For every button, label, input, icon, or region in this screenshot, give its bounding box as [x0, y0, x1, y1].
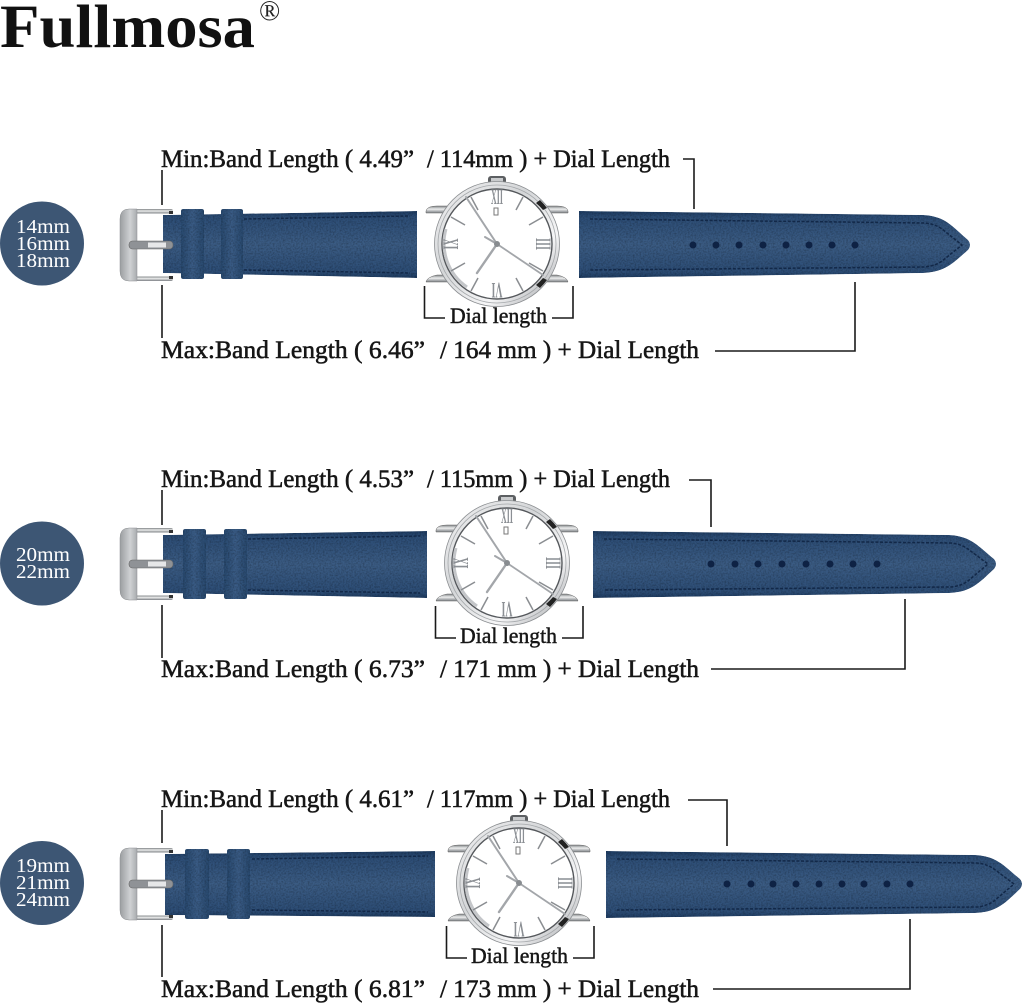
short strap with keepers [163, 209, 417, 279]
min length label [161, 146, 670, 173]
min length label: / 114mm ) + Dial Length [427, 146, 670, 173]
size badge 19mm 21mm 24mm: 19mm [16, 855, 70, 877]
size badge 20mm 22mm: 20mm [16, 544, 70, 566]
max length label: Max:Band Length ( 6.46” [161, 337, 425, 364]
size badge 19mm 21mm 24mm: 21mm [16, 872, 70, 894]
long strap with holes [579, 211, 970, 278]
min length label: Min:Band Length ( 4.53” [161, 466, 414, 493]
dial length bracket: Dial length [450, 303, 547, 328]
watch head [436, 495, 578, 626]
max length label: Max:Band Length ( 6.73” [161, 656, 425, 683]
min length label [161, 786, 670, 813]
dial length bracket [424, 286, 573, 328]
size badge 19mm 21mm 24mm [0, 841, 84, 925]
buckle [120, 528, 173, 600]
size badge 14mm 16mm 18mm: 14mm [16, 216, 70, 238]
short strap with keepers [165, 849, 435, 919]
max length label [161, 976, 699, 1003]
size badge 14mm 16mm 18mm [0, 202, 84, 286]
dial length bracket: Dial length [460, 623, 557, 648]
size badge 20mm 22mm: 22mm [16, 561, 70, 583]
row 2: 20/22mm band sizes [0, 466, 996, 683]
long strap with holes [606, 851, 1022, 918]
min and max leader lines [162, 159, 855, 351]
size badge 20mm 22mm [0, 522, 84, 606]
size badge 14mm 16mm 18mm: 16mm [16, 233, 70, 255]
min length label [161, 466, 670, 493]
max length label: / 173 mm ) + Dial Length [440, 976, 699, 1003]
max length label [161, 656, 699, 683]
dial length bracket: Dial length [471, 943, 568, 968]
short strap with keepers [163, 529, 427, 599]
dial length bracket [446, 926, 594, 968]
min and max leader lines [162, 480, 905, 669]
min length label: Min:Band Length ( 4.61” [161, 786, 414, 813]
long strap with holes [593, 531, 996, 598]
dial length bracket [436, 606, 583, 648]
size badge 19mm 21mm 24mm: 24mm [16, 889, 70, 911]
row 3: 19/21/24mm band sizes [0, 786, 1022, 1003]
max length label: / 171 mm ) + Dial Length [440, 656, 699, 683]
size badge 14mm 16mm 18mm: 18mm [16, 250, 70, 272]
min length label: / 117mm ) + Dial Length [427, 786, 670, 813]
min and max leader lines [162, 800, 910, 989]
watch head [426, 176, 568, 306]
watch head [448, 815, 590, 946]
min length label: / 115mm ) + Dial Length [427, 466, 670, 493]
buckle [120, 848, 173, 920]
min length label: Min:Band Length ( 4.49” [161, 146, 414, 173]
buckle [120, 209, 173, 281]
row 1: 14/16/18mm band sizes [0, 146, 970, 364]
max length label [161, 337, 699, 364]
max length label: / 164 mm ) + Dial Length [440, 337, 699, 364]
max length label: Max:Band Length ( 6.81” [161, 976, 425, 1003]
